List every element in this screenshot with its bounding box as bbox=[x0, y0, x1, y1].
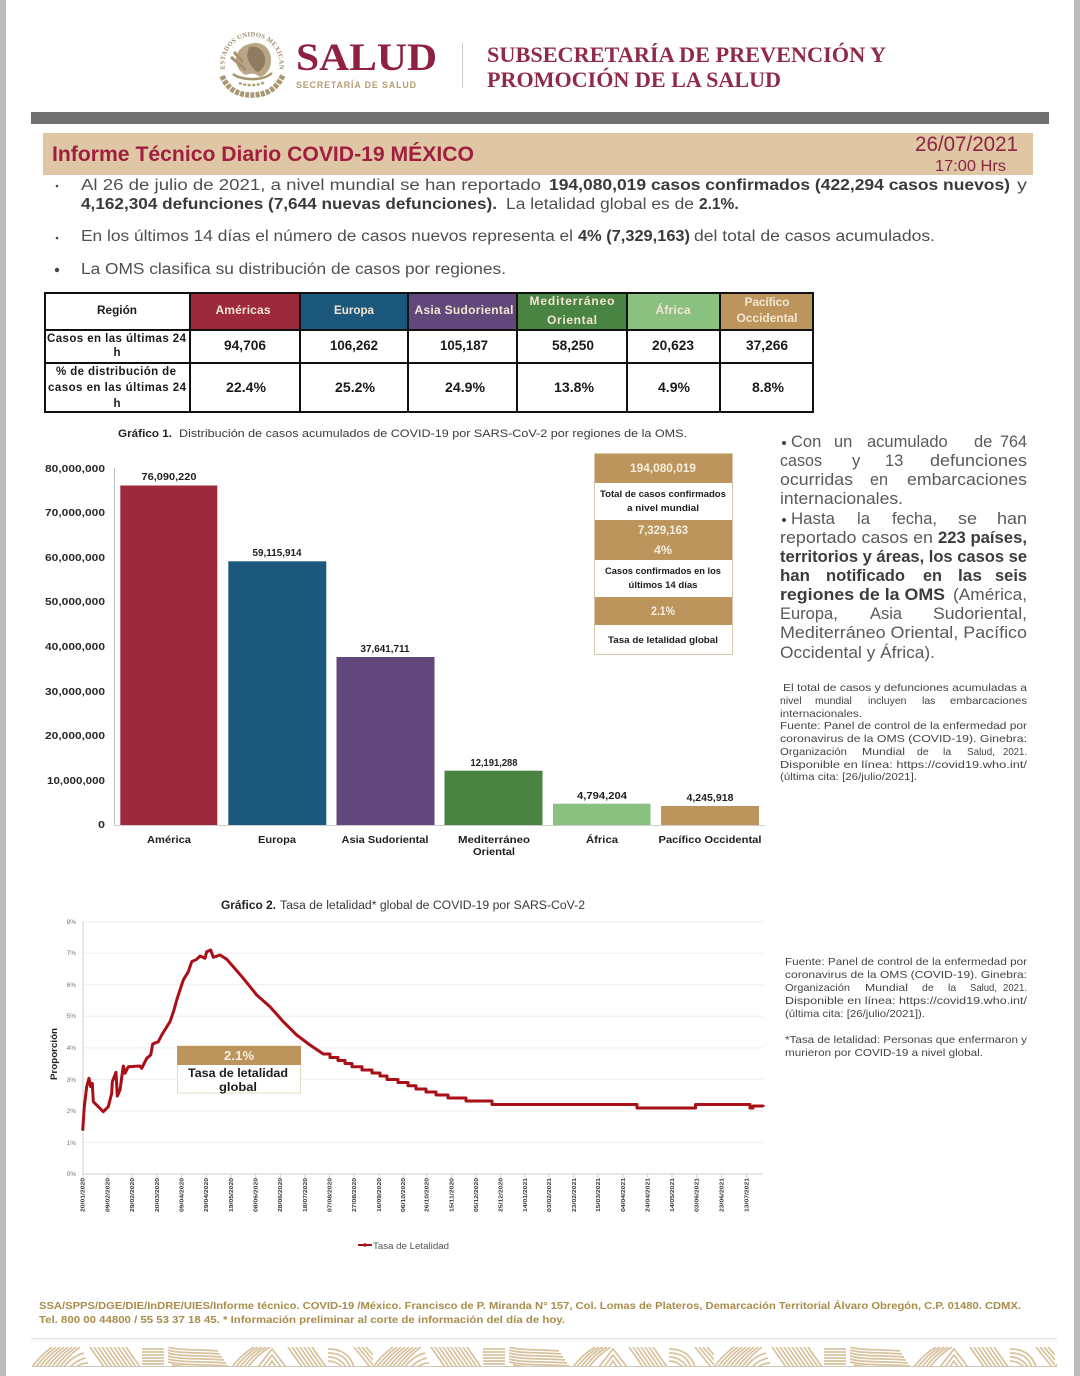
side note and source for chart 1: nivel bbox=[780, 695, 802, 707]
side note and source for chart 1: Mundial bbox=[862, 746, 905, 758]
subsecretariat name: SUBSECRETARÍA DE PREVENCIÓN Y bbox=[487, 42, 886, 67]
bar: Asia Sudoriental: Asia Sudoriental bbox=[342, 834, 429, 846]
bullet text block: En los últimos 14 días el número de casos nuevos representa el bbox=[81, 228, 573, 245]
Secretaría de Salud caption: SECRETARÍA DE SALUD bbox=[296, 80, 416, 90]
side note and source for chart 1: Organización bbox=[780, 746, 847, 758]
y axis title: Proporción bbox=[49, 1028, 60, 1080]
table header row: Oriental bbox=[547, 313, 597, 327]
table row: percentage distribution: % de distribución de bbox=[56, 366, 176, 378]
side text: ships and reporting countries: seis bbox=[995, 567, 1027, 585]
y axis labels: 20,000,000 bbox=[45, 730, 105, 742]
footer citation: Tel. 800 00 44800 / 55 53 37 18 45. * Información preliminar al corte de información del día de hoy. bbox=[39, 1314, 565, 1326]
bar: África: África bbox=[586, 833, 618, 846]
total confirmed cases bbox=[595, 454, 732, 514]
side note and source for chart 2: Fuente: Panel de control de la enfermedad por bbox=[785, 956, 1028, 968]
x axis date labels: 19/05/2020 bbox=[229, 1178, 235, 1212]
global fatality rate: Tasa de letalidad global bbox=[608, 635, 718, 646]
cases in last 14 days: últimos 14 días bbox=[628, 580, 698, 591]
side text: ships and reporting countries: Europa, bbox=[780, 605, 838, 623]
side note and source for chart 2: coronavirus de la OMS (COVID-19). Ginebra: bbox=[785, 969, 1027, 981]
legend: Tasa de Letalidad bbox=[373, 1241, 449, 1251]
x axis date labels: 03/02/2021 bbox=[547, 1178, 553, 1212]
table row: cases in the last 24 h bbox=[46, 331, 812, 362]
footer citation: SSA/SPPS/DGE/DIE/InDRE/UIES/Informe técnico. COVID-19 /México. Francisco de P. Miranda N° 157, Col. Lomas de Plateros, Demarcación Territorial Álvaro Obregón, C.P. 01480. CDMX. bbox=[39, 1299, 1021, 1312]
side text: ships and reporting countries: han bbox=[780, 567, 810, 585]
y axis labels: 80,000,000 bbox=[45, 463, 105, 475]
side text: ships and reporting countries: casos bbox=[780, 452, 822, 470]
icon: national emblem bbox=[220, 32, 286, 98]
side note and source for chart 2: *Tasa de letalidad: Personas que enfermaron y bbox=[785, 1034, 1028, 1046]
side note and source for chart 1: de bbox=[917, 746, 929, 758]
right page edge bbox=[1074, 0, 1080, 1376]
side note and source for chart 1: 2021. bbox=[1003, 746, 1027, 758]
y axis labels: 50,000,000 bbox=[45, 596, 105, 608]
side note and source for chart 2: Salud, bbox=[970, 982, 997, 994]
y axis labels: 1% bbox=[67, 1140, 76, 1147]
side text: ships and reporting countries: de bbox=[974, 433, 992, 451]
table row: percentage distribution: 24.9% bbox=[445, 379, 486, 395]
chart 1 title: Distribución de casos acumulados de COVID-19 por SARS-CoV-2 por regiones de la OMS. bbox=[179, 428, 687, 440]
side text: ships and reporting countries: Con bbox=[791, 433, 821, 451]
x axis date labels: 29/02/2020 bbox=[130, 1178, 136, 1212]
side text: ships and reporting countries: notificado bbox=[826, 567, 905, 585]
side note and source for chart 2: (última cita: [26/julio/2021]). bbox=[785, 1008, 925, 1020]
table header row bbox=[46, 294, 812, 329]
bullet text block: 4% (7,329,163) bbox=[578, 228, 690, 245]
callout: global fatality rate: global bbox=[219, 1080, 257, 1094]
side text: ships and reporting countries: la bbox=[857, 510, 871, 528]
side note and source for chart 2 bbox=[785, 956, 1028, 1059]
side note and source for chart 2: 2021. bbox=[1003, 982, 1027, 994]
table header row: Región bbox=[97, 305, 137, 317]
side note and source for chart 1: Salud, bbox=[967, 746, 995, 758]
side note and source for chart 2: Organización bbox=[785, 982, 850, 994]
table row: cases in the last 24 h: Casos en las últimas 24 bbox=[47, 333, 187, 345]
chart 1 title: Gráfico 1. bbox=[118, 428, 172, 440]
bullet text block: 2.1%. bbox=[699, 196, 739, 213]
table header row: Asia Sudoriental bbox=[414, 303, 514, 317]
side note and source for chart 1: incluyen bbox=[868, 695, 907, 707]
x axis date labels: 23/02/2021 bbox=[572, 1178, 578, 1212]
cases in last 14 days: 4% bbox=[654, 543, 672, 557]
table header row: Europa bbox=[334, 303, 374, 317]
table row: percentage distribution: 13.8% bbox=[554, 379, 595, 395]
total confirmed cases: 194,080,019 bbox=[630, 461, 696, 475]
x axis date labels: 29/04/2020 bbox=[204, 1178, 210, 1212]
table row: cases in the last 24 h: 37,266 bbox=[746, 337, 788, 353]
bar: Europa: Europa bbox=[258, 834, 296, 846]
side text: ships and reporting countries: Hasta bbox=[791, 510, 836, 528]
side text: ships and reporting countries bbox=[780, 433, 1027, 662]
table header row: Pacífico bbox=[744, 295, 790, 309]
y axis labels: 4% bbox=[67, 1045, 76, 1052]
x axis date labels: 14/01/2021 bbox=[523, 1178, 529, 1212]
line chart: global fatality rate bbox=[49, 919, 763, 1251]
y axis labels: 60,000,000 bbox=[45, 552, 105, 564]
y axis labels: 0 bbox=[98, 819, 105, 831]
callout: global fatality rate: 2.1% bbox=[224, 1048, 254, 1063]
bar: América bbox=[120, 471, 217, 846]
table: cases by region bbox=[44, 292, 814, 413]
side text: ships and reporting countries: regiones de la OMS bbox=[780, 586, 945, 604]
side text: ships and reporting countries: se bbox=[958, 510, 977, 528]
bar: Asia Sudoriental: 37,641,711 bbox=[360, 643, 410, 655]
side text: ships and reporting countries: Sudoriental, bbox=[933, 605, 1027, 623]
table row: percentage distribution bbox=[46, 364, 812, 411]
side text: ships and reporting countries: acumulado bbox=[867, 433, 948, 451]
x axis date labels: 09/02/2020 bbox=[106, 1178, 112, 1212]
report time: 17:00 Hrs bbox=[935, 158, 1006, 175]
side text: ships and reporting countries: las bbox=[958, 567, 982, 585]
side note and source for chart 1 bbox=[780, 682, 1028, 783]
cases in last 14 days: 7,329,163 bbox=[638, 523, 688, 537]
y axis labels: 5% bbox=[67, 1013, 76, 1020]
side text: ships and reporting countries: territorios y áreas, los casos se bbox=[780, 548, 1027, 566]
x axis date labels: 25/12/2020 bbox=[498, 1178, 504, 1212]
bullet text block: 4,162,304 defunciones (7,644 nuevas defunciones). bbox=[81, 196, 497, 213]
side text: ships and reporting countries: reportado casos en bbox=[780, 529, 933, 547]
bar: Pacífico Occidental: Pacífico Occidental bbox=[658, 834, 762, 846]
side note and source for chart 1: las bbox=[922, 695, 935, 707]
chart 2 title: Gráfico 2. bbox=[221, 900, 276, 912]
bar: Mediterráneo Oriental: Mediterráneo bbox=[458, 834, 530, 846]
bar: Mediterráneo Oriental: Oriental bbox=[473, 846, 515, 858]
x axis date labels bbox=[80, 1178, 750, 1212]
table row: cases in the last 24 h: 105,187 bbox=[440, 337, 488, 353]
side text: ships and reporting countries: han bbox=[997, 510, 1027, 528]
footer citation bbox=[39, 1299, 1021, 1326]
side text: ships and reporting countries: 223 países, bbox=[938, 529, 1027, 547]
bar: América: América bbox=[147, 834, 191, 846]
x axis date labels: 26/10/2020 bbox=[424, 1178, 430, 1212]
chart 2 title: Tasa de letalidad* global de COVID-19 por SARS-CoV-2 bbox=[280, 900, 585, 912]
x axis date labels: 13/07/2021 bbox=[744, 1178, 750, 1212]
side note and source for chart 2: Disponible en línea: https://covid19.who.int/ bbox=[785, 995, 1027, 1007]
side note and source for chart 1: Disponible en línea: https://covid19.who.int/ bbox=[780, 759, 1027, 771]
table header row: Occidental bbox=[736, 311, 798, 325]
side text: ships and reporting countries: embarcaciones bbox=[907, 471, 1027, 489]
x axis date labels: 15/03/2021 bbox=[596, 1178, 602, 1212]
bar: Europa: 59,115,914 bbox=[252, 547, 302, 559]
bar: Pacífico Occidental: 4,245,918 bbox=[686, 792, 734, 804]
x axis date labels: 15/11/2020 bbox=[450, 1178, 456, 1212]
global fatality rate: 2.1% bbox=[651, 604, 675, 618]
bullet text block: La letalidad global es de bbox=[506, 196, 694, 213]
x axis date labels: 20/01/2020 bbox=[80, 1178, 86, 1212]
global fatality rate bbox=[595, 597, 732, 646]
side note and source for chart 1: coronavirus de la OMS (COVID-19). Ginebra: bbox=[780, 733, 1027, 745]
table row: percentage distribution: 22.4% bbox=[226, 379, 267, 395]
table row: percentage distribution: 25.2% bbox=[335, 379, 376, 395]
x axis date labels: 08/06/2020 bbox=[254, 1178, 260, 1212]
table row: cases in the last 24 h: 94,706 bbox=[224, 337, 266, 353]
x axis date labels: 24/04/2021 bbox=[646, 1178, 652, 1212]
side text: ships and reporting countries: y bbox=[852, 452, 861, 470]
bar: África: 4,794,204 bbox=[577, 790, 627, 802]
y axis labels: 3% bbox=[67, 1077, 76, 1084]
table row: percentage distribution: h bbox=[113, 398, 121, 410]
side note and source for chart 1: internacionales. bbox=[780, 708, 862, 720]
y axis labels: 0% bbox=[67, 1171, 76, 1178]
side text: ships and reporting countries: Occidental y África). bbox=[780, 643, 935, 662]
left page edge bbox=[0, 0, 6, 1376]
cases in last 14 days: Casos confirmados en los bbox=[605, 566, 721, 577]
side note and source for chart 1: embarcaciones bbox=[950, 695, 1027, 707]
x axis date labels: 14/05/2021 bbox=[670, 1178, 676, 1212]
y axis labels: 10,000,000 bbox=[47, 775, 105, 787]
x axis date labels: 23/06/2021 bbox=[720, 1178, 726, 1212]
bar chart: cumulative cases by region bbox=[45, 463, 765, 858]
x axis date labels: 09/04/2020 bbox=[180, 1178, 186, 1212]
y axis labels: 6% bbox=[67, 982, 76, 989]
table row: cases in the last 24 h: 106,262 bbox=[330, 337, 378, 353]
bar: Mediterráneo Oriental: 12,191,288 bbox=[470, 757, 518, 769]
side text: ships and reporting countries: internacionales. bbox=[780, 490, 903, 508]
bar: Asia Sudoriental bbox=[336, 643, 434, 846]
subsecretariat name bbox=[487, 42, 886, 92]
side text: ships and reporting countries: 13 bbox=[885, 452, 903, 470]
total confirmed cases: a nivel mundial bbox=[627, 503, 699, 514]
side text: ships and reporting countries: en bbox=[870, 471, 888, 489]
bullet text block bbox=[55, 177, 1027, 278]
bar: América: 76,090,220 bbox=[142, 471, 197, 483]
bullet text block: del total de casos acumulados. bbox=[694, 228, 935, 245]
side note and source for chart 1: (última cita: [26/julio/2021]. bbox=[780, 771, 917, 783]
table header row: Américas bbox=[216, 303, 271, 317]
side text: ships and reporting countries: un bbox=[834, 433, 852, 451]
y axis labels: 8% bbox=[67, 919, 76, 926]
y axis labels bbox=[45, 463, 105, 831]
side note and source for chart 1: la bbox=[943, 746, 951, 758]
side text: ships and reporting countries: (América, bbox=[953, 586, 1027, 604]
x axis date labels: 28/06/2020 bbox=[278, 1178, 284, 1212]
side note and source for chart 1: El total de casos y defunciones acumuladas a bbox=[783, 682, 1027, 694]
report date: 26/07/2021 bbox=[915, 133, 1018, 156]
side note and source for chart 1: Fuente: Panel de control de la enfermedad por bbox=[780, 720, 1028, 732]
side note and source for chart 2: Mundial bbox=[865, 982, 908, 994]
x axis date labels: 18/07/2020 bbox=[303, 1178, 309, 1212]
bar: Mediterráneo Oriental bbox=[444, 757, 542, 858]
y axis labels: 70,000,000 bbox=[45, 507, 105, 519]
grey divider bar bbox=[31, 112, 1049, 124]
x axis date labels: 04/04/2021 bbox=[621, 1178, 627, 1212]
report title: Informe Técnico Diario COVID-19 MÉXICO bbox=[52, 143, 474, 166]
bullet text block: 194,080,019 casos confirmados (422,294 casos nuevos) bbox=[549, 177, 1010, 194]
table row: cases in the last 24 h: 20,623 bbox=[652, 337, 694, 353]
bar: África bbox=[553, 790, 650, 846]
x axis date labels: 05/12/2020 bbox=[474, 1178, 480, 1212]
callout: global fatality rate bbox=[177, 1046, 301, 1094]
title banner bbox=[43, 133, 1033, 175]
side text: ships and reporting countries: en bbox=[923, 567, 942, 585]
x axis date labels: 03/06/2021 bbox=[694, 1178, 700, 1212]
side text: ships and reporting countries: fecha, bbox=[892, 510, 937, 528]
x axis date labels: 16/09/2020 bbox=[377, 1178, 383, 1212]
subsecretariat name: PROMOCIÓN DE LA SALUD bbox=[487, 67, 781, 92]
x axis date labels: 20/03/2020 bbox=[155, 1178, 161, 1212]
total confirmed cases: Total de casos confirmados bbox=[600, 489, 726, 500]
bullet text block: La OMS clasifica su distribución de casos por regiones. bbox=[81, 261, 506, 278]
bullet text block: Al 26 de julio de 2021, a nivel mundial se han reportado bbox=[81, 177, 541, 194]
y axis labels: 7% bbox=[67, 950, 76, 957]
table row: percentage distribution: casos en las últimas 24 bbox=[48, 382, 187, 394]
side note and source for chart 2: murieron por COVID-19 a nivel global. bbox=[785, 1047, 983, 1059]
side text: ships and reporting countries: Asia bbox=[870, 605, 903, 623]
x axis date labels: 06/10/2020 bbox=[401, 1178, 407, 1212]
side text: ships and reporting countries: defunciones bbox=[930, 452, 1027, 470]
side text: ships and reporting countries: 764 bbox=[1000, 433, 1027, 451]
y axis labels: 40,000,000 bbox=[45, 641, 105, 653]
SALUD wordmark: SALUD bbox=[296, 36, 437, 79]
table row: cases in the last 24 h: h bbox=[113, 347, 121, 359]
y axis labels: 2% bbox=[67, 1108, 76, 1115]
side note and source for chart 2: de bbox=[922, 982, 934, 994]
side note and source for chart 1: mundial bbox=[815, 695, 852, 707]
fatality rate line bbox=[83, 950, 763, 1131]
bullet text block: y bbox=[1017, 177, 1027, 194]
callout: global fatality rate: Tasa de letalidad bbox=[188, 1066, 288, 1080]
table row: percentage distribution: 8.8% bbox=[752, 379, 785, 395]
table row: percentage distribution: 4.9% bbox=[658, 379, 691, 395]
bar: Europa bbox=[228, 547, 326, 846]
side text: ships and reporting countries: ocurridas bbox=[780, 471, 853, 489]
table header row: África bbox=[656, 302, 691, 317]
header: government logos and subsecretariat name bbox=[220, 32, 886, 98]
bar: Pacífico Occidental bbox=[658, 792, 762, 846]
table row: cases in the last 24 h: 58,250 bbox=[552, 337, 594, 353]
y axis labels: 30,000,000 bbox=[45, 686, 105, 698]
side note and source for chart 2: la bbox=[948, 982, 956, 994]
x axis date labels: 07/08/2020 bbox=[328, 1178, 334, 1212]
x axis date labels: 27/08/2020 bbox=[352, 1178, 358, 1212]
table header row: Mediterráneo bbox=[530, 294, 614, 308]
summary box: global totals bbox=[594, 454, 732, 654]
side text: ships and reporting countries: Mediterráneo Oriental, Pacífico bbox=[780, 624, 1027, 642]
y axis labels bbox=[67, 919, 76, 1178]
cases in last 14 days bbox=[595, 520, 732, 591]
